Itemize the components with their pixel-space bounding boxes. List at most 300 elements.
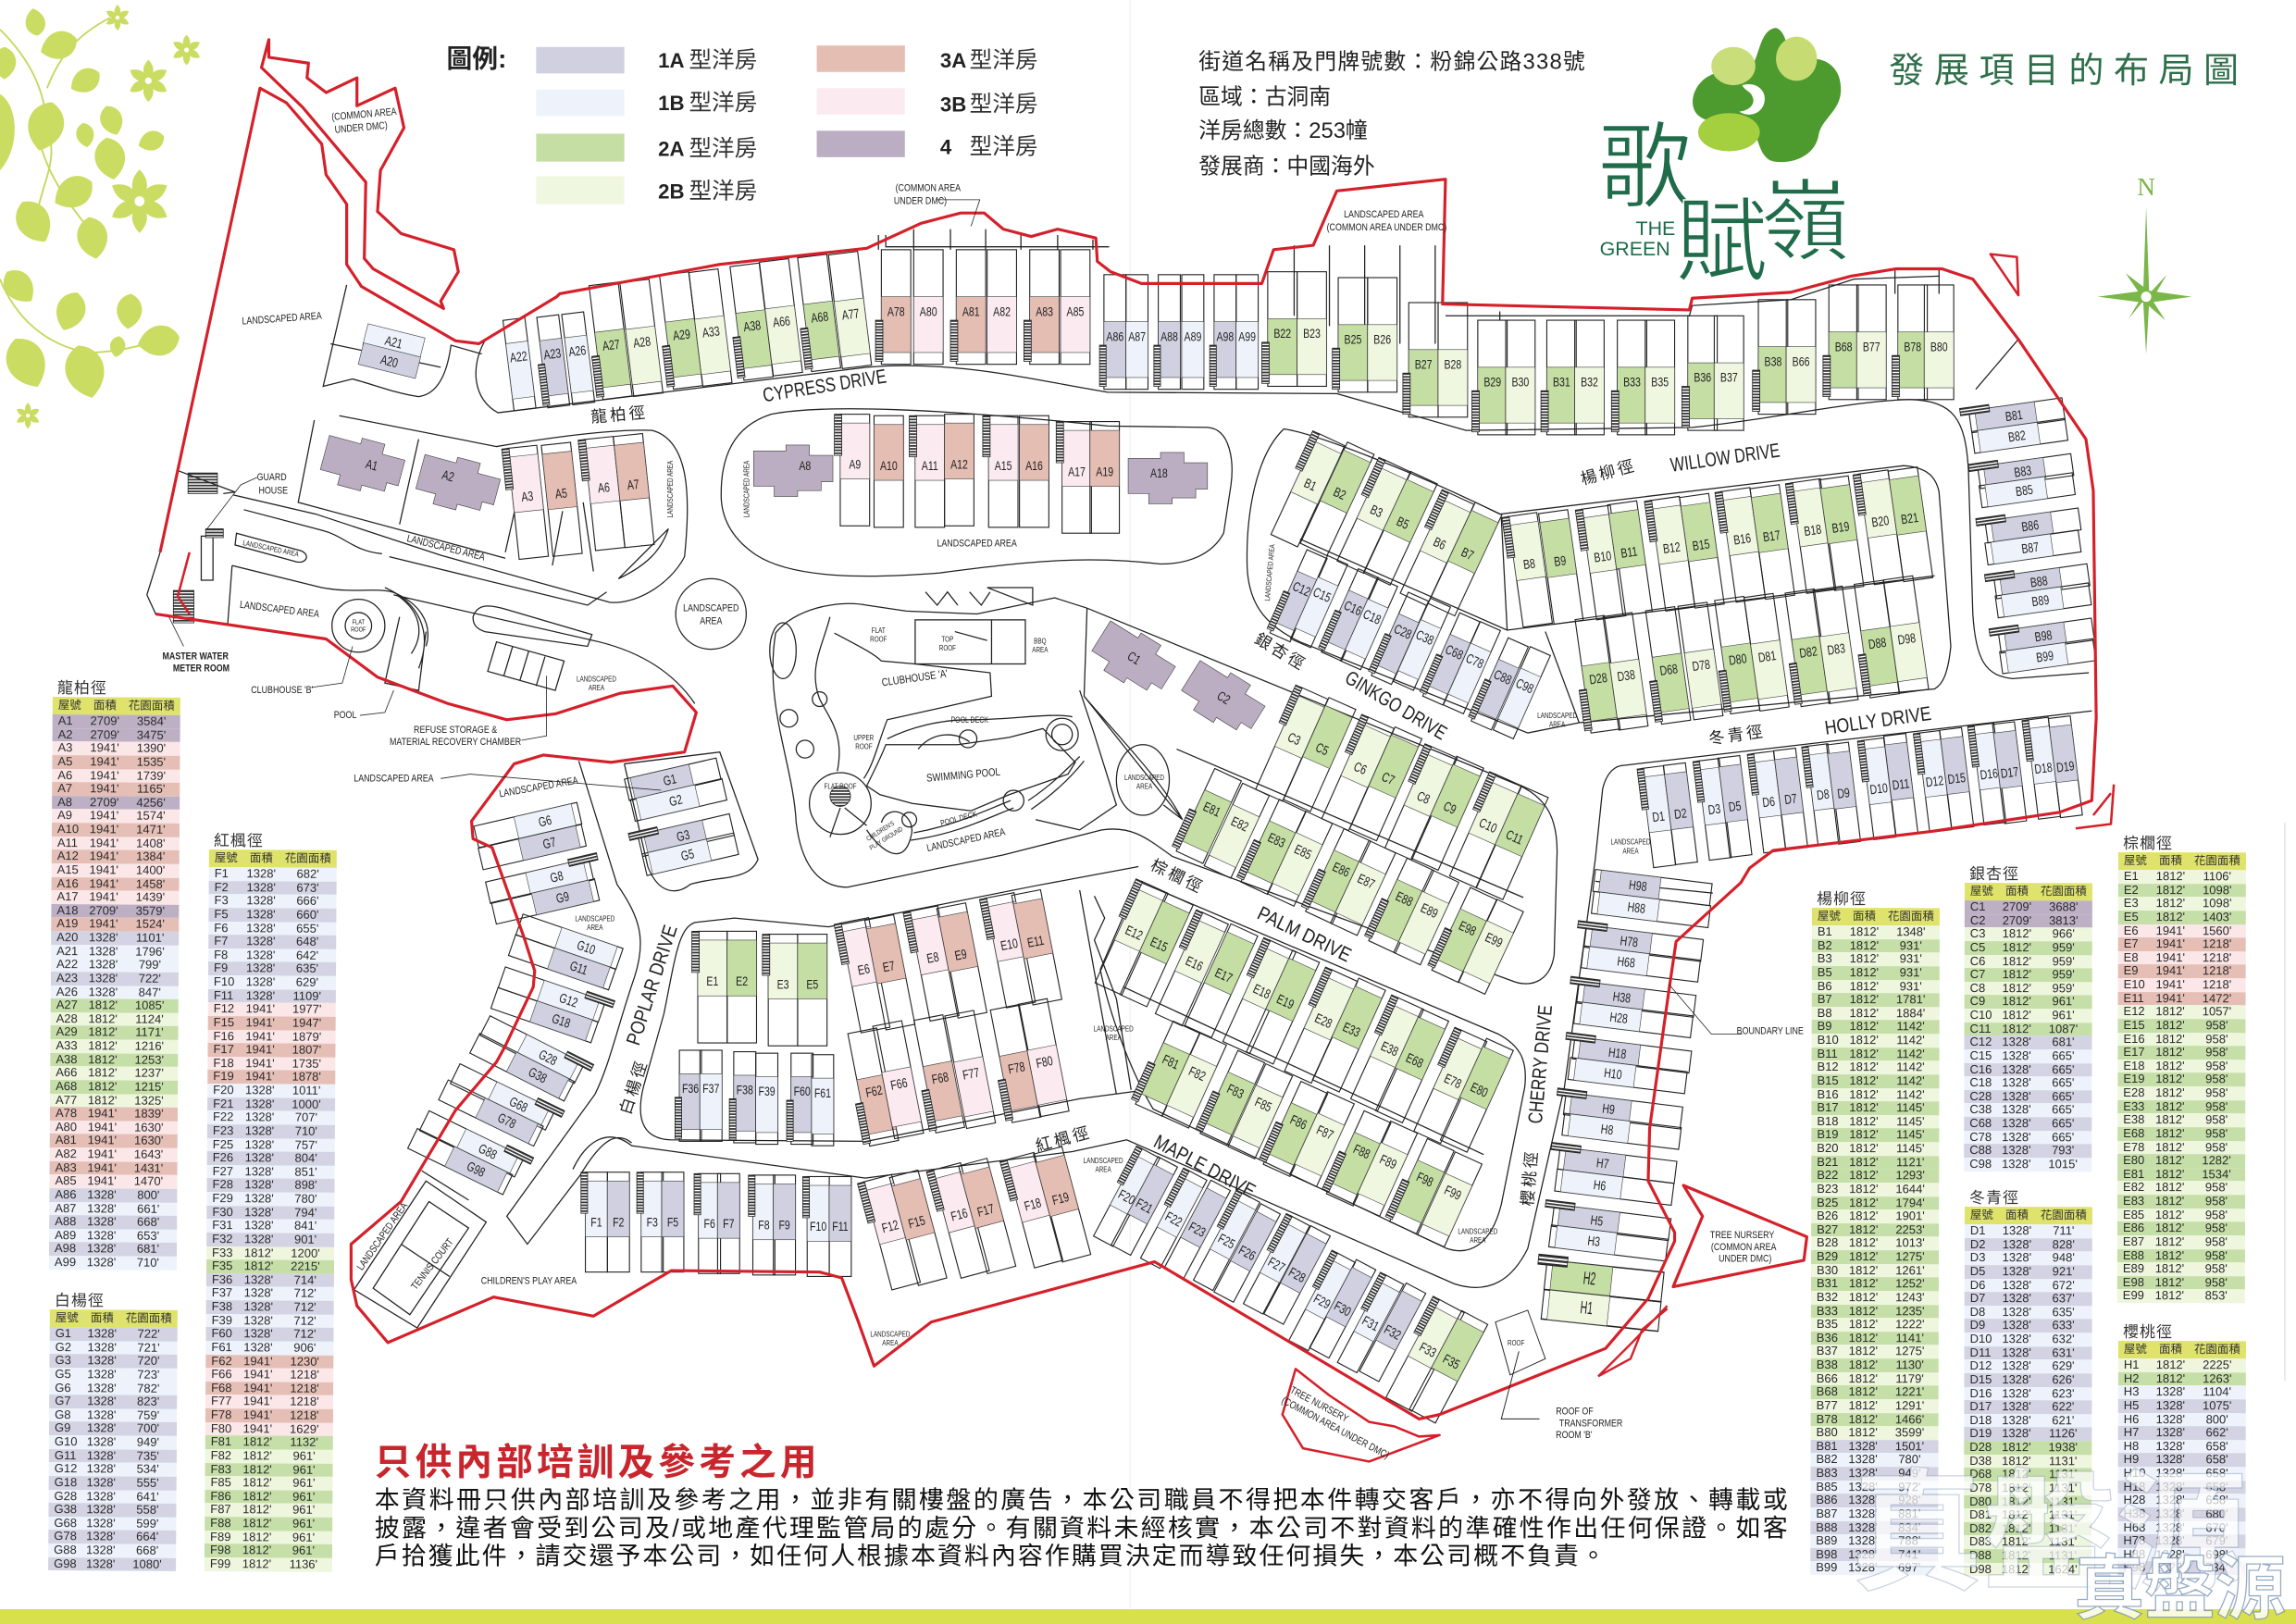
table: Palm Drive 棕櫚徑: 1098' (2203, 896, 2231, 911)
table: Poplar Drive 白楊徑: 558' (136, 1503, 159, 1517)
houses: D1 to D19 south of Holly Drive: D5 (1728, 799, 1742, 814)
legend item 2B: 2B (658, 180, 685, 203)
houses: G column along Poplar Drive: G6 (537, 812, 553, 830)
table: Cypress Drive 龍柏徑: 710' (137, 1256, 159, 1270)
legend item 2B (536, 176, 757, 205)
table: Willow Drive 楊柳徑: 1812' (1849, 1209, 1878, 1222)
area annotations: LANDSCAPED (1124, 774, 1164, 782)
table: Willow Drive 楊柳徑: B80 (1817, 1425, 1838, 1439)
table: Cypress Drive 龍柏徑: 668' (137, 1215, 159, 1229)
houses: E81 to E99 north of Palm Drive: E82 (1229, 814, 1251, 835)
houses: G column along Poplar Drive: G8 (549, 869, 565, 886)
houses: Cypress Drive south blocks: A7 (627, 477, 639, 493)
road names: 銀杏徑 (1251, 629, 1310, 675)
table: Maple Drive 紅楓徑: 1812' (242, 1462, 272, 1476)
area annotations: ROOF (939, 645, 957, 652)
table: Cypress Drive 龍柏徑: 2709' (90, 795, 118, 809)
table: Willow Drive 楊柳徑: 1812' (1850, 979, 1879, 993)
houses: central block E1 to E11 and F36 to F80 (675, 889, 1069, 1147)
table: Maple Drive 紅楓徑: F16 (214, 1029, 234, 1043)
houses: G column along Poplar Drive: G28 (536, 1047, 559, 1069)
table: Willow Drive 楊柳徑: 1142' (1896, 1087, 1925, 1101)
table: Palm Drive 棕櫚徑: 1812' (2155, 1234, 2184, 1248)
table: Willow Drive 楊柳徑: 1328' (1848, 1560, 1877, 1575)
houses: E81 to E99 north of Palm Drive: E81 (1201, 800, 1222, 820)
table: Holly Drive 冬青徑: D19 (1969, 1426, 1992, 1440)
table: Ginkgo Drive 銀杏徑: 665' (2052, 1075, 2074, 1089)
table: Holly Drive 冬青徑: 1131' (2049, 1454, 2077, 1468)
table: Poplar Drive 白楊徑: G2 (56, 1340, 71, 1354)
houses: F1 to F35 south of Maple Drive: F9 (778, 1218, 790, 1233)
table: Maple Drive 紅楓徑: 1328' (246, 907, 276, 921)
table: Cypress Drive 龍柏徑: 1328' (87, 1255, 116, 1269)
table: Cherry Drive 櫻桃徑: 1328' (2155, 1452, 2185, 1467)
area annotations: LANDSCAPED AREA (242, 311, 322, 328)
table: Holly Drive 冬青徑: 1938' (2049, 1440, 2078, 1454)
houses: central block E1 to E11 and F36 to F80: F61 (814, 1085, 831, 1100)
houses: E12 to E80 south of Palm Drive: E15 (1148, 935, 1170, 955)
table: Ginkgo Drive 銀杏徑: 花園面積 (2041, 885, 2087, 898)
table: Willow Drive 楊柳徑: B82 (1816, 1452, 1838, 1466)
table: Willow Drive 楊柳徑: 1812' (1850, 951, 1879, 965)
houses: central block E1 to E11 and F36 to F80: F36 (682, 1082, 699, 1096)
table: Holly Drive 冬青徑: 1131' (2049, 1467, 2077, 1481)
legend item 2B: 型洋房 (689, 178, 757, 204)
table: Cherry Drive 櫻桃徑: 1328' (2155, 1480, 2185, 1494)
table: Willow Drive 楊柳徑: 2253' (1895, 1222, 1925, 1236)
legend item 1A: 1A (658, 49, 685, 72)
table: Cypress Drive 龍柏徑: A3 (57, 740, 72, 754)
table: Poplar Drive 白楊徑: 1328' (87, 1394, 117, 1408)
houses: Cypress Drive north row: A81 (962, 304, 980, 319)
table: Willow Drive 楊柳徑: 1812' (1849, 1047, 1879, 1060)
houses: D28 to D98 north of Holly Drive: D88 (1868, 635, 1887, 652)
area annotations: MASTER WATER (163, 651, 230, 663)
table: Cypress Drive 龍柏徑: 1408' (136, 836, 166, 849)
houses: B81 to B99 column: B86 (2020, 517, 2040, 535)
houses: Cypress Drive north row: A99 (1238, 329, 1256, 344)
table: Maple Drive 紅楓徑: 面積 (250, 851, 273, 864)
table: Maple Drive 紅楓徑: 1328' (246, 988, 275, 1002)
table: Maple Drive 紅楓徑: F88 (210, 1516, 231, 1530)
table: Cherry Drive 櫻桃徑: 670' (2205, 1520, 2228, 1534)
table: Holly Drive 冬青徑: 1328' (2003, 1264, 2031, 1278)
table: Palm Drive 棕櫚徑: 853' (2205, 1289, 2228, 1303)
legend item 3A: 型洋房 (970, 47, 1037, 73)
table: Willow Drive 楊柳徑: B36 (1817, 1331, 1838, 1345)
table: Poplar Drive 白楊徑: G78 (54, 1529, 77, 1543)
area annotations: ROOF (855, 743, 873, 751)
table: Cherry Drive 櫻桃徑: 1328' (2156, 1412, 2185, 1426)
area annotations: LANDSCAPED (1537, 713, 1577, 720)
table: Poplar Drive 白楊徑: 949' (137, 1435, 159, 1449)
table: Willow Drive 楊柳徑: 1275' (1895, 1249, 1925, 1263)
table: Willow Drive 楊柳徑: 949' (1898, 1466, 1920, 1480)
table: Poplar Drive 白楊徑: 1328' (87, 1421, 116, 1435)
table: Cypress Drive 龍柏徑: 1171' (135, 1025, 164, 1039)
table: Cherry Drive 櫻桃徑: 1263' (2203, 1371, 2232, 1385)
logo: The Green (1598, 28, 1849, 300)
table: Willow Drive 楊柳徑: B35 (1817, 1317, 1838, 1331)
table: Poplar Drive 白楊徑: 1328' (86, 1556, 115, 1570)
table: Maple Drive 紅楓徑: 1328' (245, 1083, 275, 1097)
houses: F1 to F35 south of Maple Drive: F10 (810, 1220, 826, 1234)
houses: D1 to D19 south of Holly Drive: D2 (1673, 806, 1688, 822)
table: Ginkgo Drive 銀杏徑: 面積 (2005, 885, 2029, 898)
legend item 3B: 3B (940, 93, 966, 117)
houses: E12 to E80 south of Palm Drive: E16 (1184, 953, 1205, 974)
table: Poplar Drive 白楊徑: 720' (137, 1354, 160, 1368)
table: Willow Drive 楊柳徑: 1812' (1849, 1033, 1879, 1047)
road names: GINKGO DRIVE (1341, 666, 1451, 744)
houses: G column along Poplar Drive: G18 (550, 1011, 572, 1031)
table: Willow Drive 楊柳徑: B17 (1817, 1100, 1839, 1114)
table: Maple Drive 紅楓徑: F20 (213, 1083, 234, 1097)
table: Cypress Drive 龍柏徑: A2 (58, 727, 73, 741)
houses: D1 to D19 south of Holly Drive: D18 (2033, 760, 2054, 776)
table: Palm Drive 棕櫚徑: 958' (2205, 1018, 2228, 1032)
table: Cypress Drive 龍柏徑: 653' (137, 1228, 159, 1243)
table: Cypress Drive 龍柏徑: 屋號 (58, 699, 81, 712)
table: Willow Drive 楊柳徑: 1812' (1849, 1249, 1878, 1263)
houses: G column along Poplar Drive: G3 (676, 827, 691, 845)
table: Willow Drive 楊柳徑: B21 (1817, 1155, 1838, 1169)
legend item 1A: 型洋房 (689, 47, 757, 73)
table: Maple Drive 紅楓徑: 1218' (290, 1408, 319, 1422)
table: Willow Drive 楊柳徑: 1812' (1849, 1100, 1879, 1114)
table: Cypress Drive 龍柏徑: 1216' (135, 1039, 164, 1053)
table: Cherry Drive 櫻桃徑: 734' (2205, 1561, 2228, 1575)
houses: F81 to F99 north of Maple Drive: F87 (1314, 1122, 1335, 1143)
table: Cypress Drive 龍柏徑: 1941' (89, 917, 118, 931)
table: Cherry Drive 櫻桃徑: H10 (2124, 1466, 2145, 1480)
table: Ginkgo Drive 銀杏徑: 1328' (2002, 1102, 2031, 1117)
houses: Cypress Drive north row: A38 (742, 318, 762, 335)
road names: CHERRY DRIVE (1524, 1004, 1557, 1124)
table: Willow Drive 楊柳徑: B88 (1816, 1520, 1837, 1534)
houses: F1 to F35 south of Maple Drive: F27 (1266, 1255, 1287, 1275)
table: Maple Drive 紅楓徑: 961' (292, 1462, 316, 1476)
table: Maple Drive 紅楓徑 (204, 832, 337, 1572)
houses: Cypress Drive north row: A80 (920, 304, 937, 319)
logo: The Green: GREEN (1600, 238, 1670, 260)
table: Maple Drive 紅楓徑: 1941' (243, 1381, 272, 1395)
table: Maple Drive 紅楓徑: 961' (292, 1517, 315, 1531)
table: Cypress Drive 龍柏徑: A33 (56, 1038, 78, 1052)
table: Cherry Drive 櫻桃徑: 1328' (2156, 1425, 2185, 1439)
table: Poplar Drive 白楊徑: 641' (136, 1489, 159, 1503)
table: Maple Drive 紅楓徑: F37 (212, 1285, 232, 1300)
table: Maple Drive 紅楓徑: 1941' (246, 1002, 275, 1016)
table: Willow Drive 楊柳徑: 3599' (1895, 1425, 1924, 1439)
table: Cypress Drive 龍柏徑: A11 (57, 836, 78, 849)
table: Willow Drive 楊柳徑: 1328' (1848, 1452, 1878, 1467)
legend item 3A (817, 45, 1037, 73)
table: Holly Drive 冬青徑: 1131' (2049, 1535, 2077, 1549)
table: Willow Drive 楊柳徑: 1812' (1849, 1276, 1878, 1290)
table: Ginkgo Drive 銀杏徑: C78 (1969, 1130, 1992, 1144)
legend item 3B (817, 88, 1037, 118)
table: Holly Drive 冬青徑: 1328' (2003, 1305, 2031, 1319)
table: Maple Drive 紅楓徑: F86 (210, 1489, 231, 1503)
table: Cherry Drive 櫻桃徑: 679' (2205, 1533, 2228, 1547)
area annotations: LANDSCAPED AREA (355, 1200, 411, 1272)
houses: F81 to F99 north of Maple Drive: F98 (1414, 1170, 1435, 1190)
houses: H column along Cherry Drive: H10 (1603, 1066, 1622, 1083)
logo: The Green: 歌 (1598, 92, 1693, 228)
houses: H column along Cherry Drive: H6 (1593, 1178, 1607, 1194)
table: Palm Drive 棕櫚徑: 1941' (2156, 924, 2185, 937)
table: Cypress Drive 龍柏徑: 1524' (135, 917, 165, 931)
table: Maple Drive 紅楓徑: 1629' (290, 1421, 319, 1435)
table: Holly Drive 冬青徑: 花園面積 (2041, 1209, 2087, 1221)
houses: E12 to E80 south of Palm Drive: E12 (1123, 923, 1145, 943)
table: Palm Drive 棕櫚徑: 1941' (2155, 991, 2185, 1005)
table: Holly Drive 冬青徑: D68 (1969, 1467, 1992, 1481)
table: Maple Drive 紅楓徑: 紅楓徑 (214, 832, 264, 849)
houses: C12 to C98 north of Ginkgo Drive: C16 (1342, 598, 1364, 619)
houses: F1 to F35 south of Maple Drive: F26 (1236, 1243, 1258, 1264)
table: Maple Drive 紅楓徑: 1812' (244, 1258, 273, 1273)
table: Ginkgo Drive 銀杏徑: 1812' (2003, 967, 2031, 981)
table: Maple Drive 紅楓徑: 710' (295, 1123, 317, 1138)
table: Palm Drive 棕櫚徑: 1812' (2155, 1032, 2185, 1046)
area annotations: UNDER DMC) (334, 120, 388, 136)
houses: F1 to F35 south of Maple Drive: F23 (1186, 1220, 1208, 1240)
table: Holly Drive 冬青徑: D10 (1970, 1332, 1992, 1345)
table: Cherry Drive 櫻桃徑: 658' (2205, 1480, 2228, 1494)
houses: Cypress Drive south blocks: A12 (950, 457, 968, 472)
houses: H column along Cherry Drive: H28 (1609, 1010, 1629, 1026)
area annotations (163, 106, 1804, 1461)
table: Willow Drive 楊柳徑 (1810, 890, 1940, 1575)
table: Willow Drive 楊柳徑: 1275' (1895, 1345, 1924, 1358)
development information: 洋房總數：253幢 (1198, 118, 1368, 143)
table: Cypress Drive 龍柏徑: A12 (57, 849, 79, 862)
table: Cypress Drive 龍柏徑: 1941' (90, 836, 118, 849)
table: Holly Drive 冬青徑: D3 (1970, 1250, 1985, 1264)
table: Poplar Drive 白楊徑: 1328' (86, 1530, 116, 1543)
houses: E81 to E99 north of Palm Drive: E99 (1483, 930, 1505, 950)
table: Maple Drive 紅楓徑: 1812' (242, 1475, 272, 1490)
table: Poplar Drive 白楊徑: 1328' (87, 1381, 117, 1395)
table: Holly Drive 冬青徑: D81 (1969, 1507, 1992, 1521)
houses: C12 to C98 north of Ginkgo Drive: C98 (1513, 676, 1536, 697)
table: Willow Drive 楊柳徑: B19 (1817, 1127, 1839, 1141)
table: Ginkgo Drive 銀杏徑: C3 (1970, 926, 1985, 940)
table: Cypress Drive 龍柏徑: 1328' (89, 944, 118, 958)
table: Cypress Drive 龍柏徑: 1839' (134, 1107, 164, 1121)
houses: Cypress Drive south blocks: A5 (554, 486, 568, 502)
table: Willow Drive 楊柳徑: 1328' (1848, 1493, 1878, 1506)
table: Ginkgo Drive 銀杏徑: 959' (2053, 967, 2075, 981)
table: Maple Drive 紅楓徑: 1328' (245, 1110, 274, 1124)
houses: B1 to B21 south of Willow Drive: B19 (1831, 519, 1850, 536)
table: Cherry Drive 櫻桃徑: 1328' (2156, 1384, 2185, 1398)
houses: E12 to E80 south of Palm Drive: E38 (1379, 1038, 1400, 1060)
table: Maple Drive 紅楓徑: F87 (210, 1502, 231, 1517)
table: Maple Drive 紅楓徑: 961' (292, 1530, 315, 1543)
table: Maple Drive 紅楓徑: F6 (214, 921, 229, 935)
table: Willow Drive 楊柳徑: B11 (1818, 1047, 1838, 1060)
table: Maple Drive 紅楓徑: F15 (214, 1015, 234, 1029)
table: Cypress Drive 龍柏徑: 1328' (87, 1214, 117, 1229)
table: Holly Drive 冬青徑: D38 (1969, 1454, 1992, 1468)
table: Cypress Drive 龍柏徑: 花園面積 (129, 700, 175, 713)
houses: E12 to E80 south of Palm Drive: E78 (1442, 1071, 1464, 1092)
table: Holly Drive 冬青徑: 622' (2052, 1399, 2074, 1413)
houses: B1 to B21 south of Willow Drive: B21 (1900, 510, 1919, 527)
logo: The Green: THE (1636, 217, 1675, 240)
table: Cypress Drive 龍柏徑: A15 (57, 862, 79, 876)
table: Maple Drive 紅楓徑: 1230' (290, 1354, 319, 1368)
table: Ginkgo Drive 銀杏徑: 665' (2052, 1103, 2074, 1117)
houses: B81 to B99 column: B85 (2015, 482, 2034, 500)
table: Holly Drive 冬青徑: 1328' (2002, 1386, 2031, 1400)
area annotations: AREA (1549, 721, 1565, 729)
table: Willow Drive 楊柳徑: 1142' (1896, 1020, 1925, 1034)
area annotations: LANDSCAPED (870, 1331, 910, 1339)
table: Poplar Drive 白楊徑: G10 (55, 1434, 78, 1448)
table: Palm Drive 棕櫚徑: 1812' (2155, 1099, 2185, 1113)
houses: Cypress Drive north row: A22 (509, 349, 528, 366)
table: Willow Drive 楊柳徑: 1812' (1849, 1114, 1879, 1128)
table: Ginkgo Drive 銀杏徑: 1812' (2003, 926, 2031, 940)
houses: F1 to F35 south of Maple Drive: F29 (1311, 1291, 1333, 1312)
area annotations: TENNIS COURT (409, 1237, 456, 1293)
table: Cypress Drive 龍柏徑: 1328' (87, 1242, 116, 1256)
houses: C1 to C11 south of Ginkgo Drive (1086, 616, 1548, 899)
table: Willow Drive 楊柳徑: 1794' (1895, 1196, 1925, 1209)
houses: Willow Drive north row: B31 (1553, 375, 1570, 390)
houses: E12 to E80 south of Palm Drive: E18 (1251, 982, 1272, 1002)
table: Ginkgo Drive 銀杏徑: 1328' (2002, 1075, 2031, 1089)
table: Maple Drive 紅楓徑: 757' (295, 1137, 317, 1151)
table: Maple Drive 紅楓徑: 707' (295, 1110, 317, 1124)
table: Cypress Drive 龍柏徑: 1941' (90, 809, 118, 823)
area annotations: REFUSE STORAGE & (414, 725, 497, 736)
table: Ginkgo Drive 銀杏徑: 1328' (2002, 1143, 2031, 1157)
table: Holly Drive 冬青徑: 621' (2052, 1413, 2074, 1427)
table: Ginkgo Drive 銀杏徑: 1328' (2002, 1157, 2030, 1171)
table: Maple Drive 紅楓徑: 712' (293, 1300, 316, 1314)
area annotations: MATERIAL RECOVERY CHAMBER (390, 737, 521, 748)
table: Willow Drive 楊柳徑: B28 (1817, 1235, 1838, 1249)
table: Maple Drive 紅楓徑: 1812' (242, 1516, 271, 1530)
table: Cypress Drive 龍柏徑: 1400' (136, 862, 165, 877)
houses: D28 to D98 north of Holly Drive: D82 (1798, 644, 1818, 661)
houses: Willow Drive north row: B23 (1303, 327, 1321, 341)
table: Palm Drive 棕櫚徑: 花園面積 (2194, 854, 2240, 867)
table: Willow Drive 楊柳徑: 1812' (1849, 1344, 1878, 1358)
table: Willow Drive 楊柳徑: 1812' (1849, 1371, 1878, 1385)
table: Maple Drive 紅楓徑: F12 (214, 1001, 234, 1015)
houses: C12 to C98 north of Ginkgo Drive: C18 (1360, 607, 1384, 627)
table: Maple Drive 紅楓徑: F77 (211, 1394, 231, 1408)
table: Willow Drive 楊柳徑: B6 (1818, 979, 1832, 993)
table: Palm Drive 棕櫚徑: 1812' (2155, 1018, 2185, 1032)
houses: D1 to D19 south of Holly Drive: D19 (2055, 759, 2075, 775)
table: Willow Drive 楊柳徑: B25 (1817, 1196, 1838, 1209)
table: Poplar Drive 白楊徑: 555' (136, 1475, 159, 1490)
houses: F1 to F35 south of Maple Drive: F19 (1050, 1189, 1071, 1209)
table: Maple Drive 紅楓徑: 682' (296, 867, 319, 881)
table: Ginkgo Drive 銀杏徑: 665' (2052, 1062, 2074, 1076)
table: Cypress Drive 龍柏徑: A68 (56, 1079, 77, 1093)
table: Holly Drive 冬青徑: 1328' (2002, 1345, 2031, 1359)
houses: central block E1 to E11 and F36 to F80: F78 (1007, 1060, 1026, 1077)
site boundary line (155, 40, 2114, 1461)
table: Maple Drive 紅楓徑: 2215' (291, 1259, 320, 1273)
watermark: large: 真盤源 (1851, 1426, 2248, 1618)
houses: C1 to C11 south of Ginkgo Drive: C6 (1351, 759, 1369, 777)
table: Palm Drive 棕櫚徑: E82 (2123, 1180, 2144, 1194)
table: Maple Drive 紅楓徑: 1812' (242, 1503, 272, 1517)
legend item 2A (536, 133, 757, 162)
table: Maple Drive 紅楓徑: 1328' (244, 1219, 274, 1233)
table: Willow Drive 楊柳徑: B18 (1817, 1114, 1839, 1128)
area annotations: LANDSCAPED (1094, 1025, 1134, 1034)
houses: Willow Drive north row: B38 (1765, 354, 1781, 369)
houses: C12 to C98 north of Ginkgo Drive: C15 (1310, 585, 1334, 605)
table: Cypress Drive 龍柏徑: A26 (56, 985, 78, 998)
houses: B1 to B21 south of Willow Drive: B17 (1762, 527, 1781, 545)
houses: E12 to E80 south of Palm Drive: E33 (1340, 1020, 1362, 1040)
table: Ginkgo Drive 銀杏徑: 959' (2052, 981, 2075, 995)
table: Palm Drive 棕櫚徑: 1098' (2203, 883, 2232, 897)
table: Maple Drive 紅楓徑: 655' (296, 921, 318, 935)
table: Ginkgo Drive 銀杏徑: 1328' (2002, 1048, 2031, 1062)
table: Palm Drive 棕櫚徑: E83 (2123, 1194, 2144, 1208)
table: Palm Drive 棕櫚徑: E88 (2123, 1248, 2144, 1262)
houses: B81 to B99 column: B83 (2013, 464, 2032, 480)
table: Palm Drive 棕櫚徑: E68 (2123, 1126, 2144, 1140)
table: Ginkgo Drive 銀杏徑: 2709' (2003, 899, 2031, 913)
houses: Cypress Drive south blocks: A19 (1096, 465, 1113, 479)
houses: H column along Cherry Drive: H5 (1590, 1213, 1604, 1229)
table: Palm Drive 棕櫚徑: 1812' (2156, 910, 2185, 924)
area annotations: ROOM 'B' (1556, 1430, 1593, 1441)
legend item type 4: 4 (940, 136, 952, 159)
table: Willow Drive 楊柳徑: 1142' (1896, 1060, 1925, 1074)
table: Willow Drive 楊柳徑: 1812' (1849, 1060, 1879, 1073)
table: Willow Drive 楊柳徑: 1328' (1848, 1533, 1878, 1547)
table: Cypress Drive 龍柏徑: 1812' (88, 1093, 117, 1107)
table: Willow Drive 楊柳徑: 1142' (1896, 1073, 1925, 1087)
table: Poplar Drive 白楊徑: G1 (56, 1326, 71, 1340)
table: Maple Drive 紅楓徑: F28 (212, 1177, 233, 1192)
houses: Cypress Drive north row: A82 (993, 304, 1011, 319)
table: Cypress Drive 龍柏徑: A9 (57, 808, 72, 823)
houses: F1 to F35 south of Maple Drive: F15 (907, 1213, 926, 1232)
table: Willow Drive 楊柳徑: B85 (1816, 1480, 1838, 1494)
table: Ginkgo Drive 銀杏徑: C38 (1969, 1102, 1992, 1116)
houses: F81 to F99 north of Maple Drive: F89 (1377, 1152, 1399, 1172)
houses: G column along Poplar Drive: G5 (679, 847, 696, 863)
houses: central block E1 to E11 and F36 to F80: F60 (794, 1085, 811, 1099)
houses: F1 to F35 south of Maple Drive: F21 (1134, 1196, 1155, 1217)
table: Cypress Drive 龍柏徑: A18 (56, 903, 79, 917)
icon: north compass: N (2137, 173, 2155, 201)
houses: H column along Cherry Drive (1535, 870, 1712, 1332)
table: Maple Drive 紅楓徑: F11 (214, 988, 233, 1002)
table: Holly Drive 冬青徑: 1131' (2049, 1521, 2077, 1535)
area annotations: FLAT (872, 627, 886, 635)
table: Willow Drive 楊柳徑: 1812' (1849, 1182, 1878, 1196)
table: Maple Drive 紅楓徑: F78 (211, 1407, 231, 1421)
notice body text: 本資料冊只供內部培訓及參考之用，並非有關樓盤的廣告，本公司職員不得把本件轉交客戶，亦不得向外發放、轉載或 (375, 1486, 1788, 1514)
table: Ginkgo Drive 銀杏徑: 1087' (2049, 1022, 2078, 1035)
